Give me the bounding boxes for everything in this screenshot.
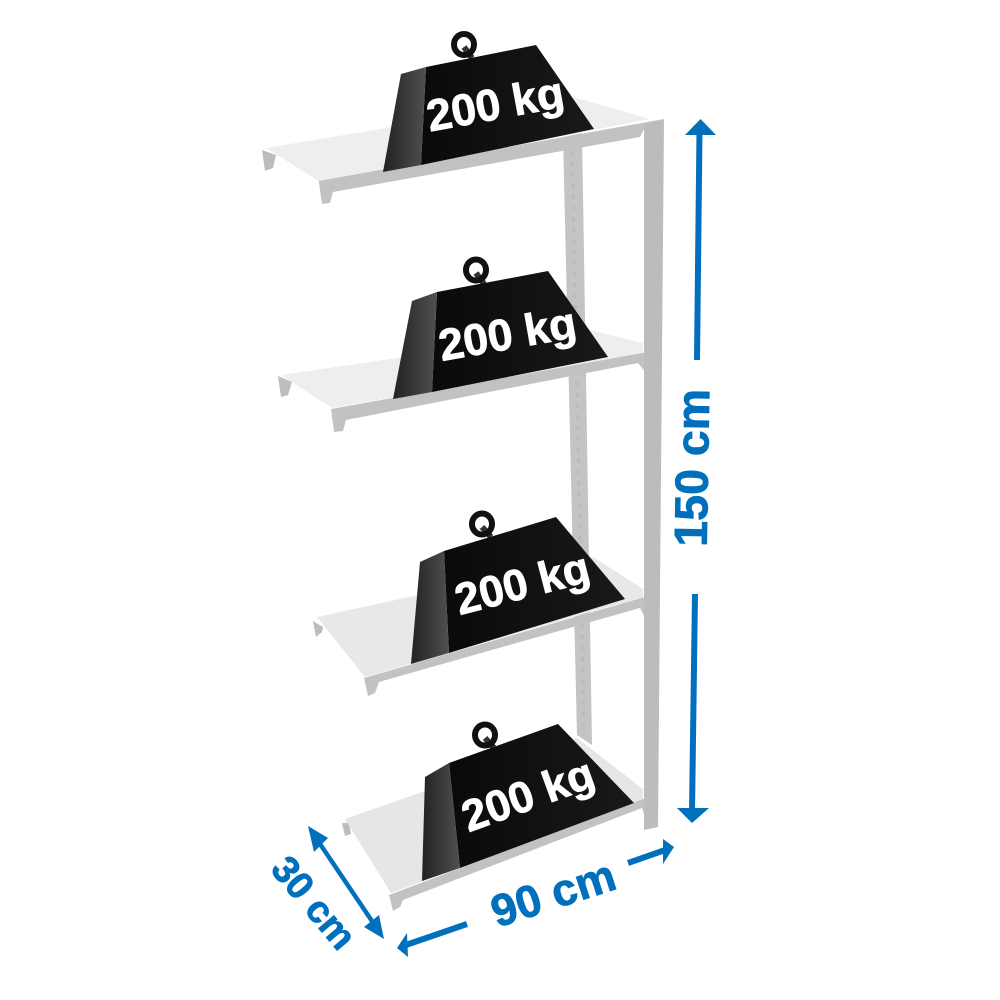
weight label 4: 200 kg <box>455 749 601 842</box>
weight side 2 <box>393 292 437 399</box>
arrow: width left <box>397 924 467 957</box>
weight label 2: 200 kg <box>435 299 580 371</box>
weight 4 <box>422 724 634 881</box>
icon: lifting ring 2 <box>466 260 486 284</box>
weight body 2 <box>432 271 608 392</box>
icon: lifting ring 1 <box>454 34 474 58</box>
weight 2 <box>393 260 608 399</box>
back upright post <box>563 133 592 745</box>
weight 1 <box>383 34 594 172</box>
icon: lifting ring 3 <box>472 514 492 537</box>
label: width: 90 cm <box>485 849 622 937</box>
weight label 3: 200 kg <box>450 543 595 625</box>
label: depth: 30 cm <box>262 849 364 958</box>
label: height: 150 cm <box>665 388 719 547</box>
weight body 3 <box>444 517 625 653</box>
weight body 4 <box>449 724 634 868</box>
arrow: height lower <box>677 594 709 823</box>
arrow: depth <box>308 826 384 939</box>
arrow: width right <box>628 839 674 864</box>
front upright post <box>644 119 664 830</box>
weight 3 <box>411 514 625 664</box>
weight label 1: 200 kg <box>423 68 568 141</box>
icon: lifting ring 4 <box>475 724 495 748</box>
shelf 4 <box>342 738 646 911</box>
weight side 3 <box>411 551 449 664</box>
weight side 1 <box>383 67 426 172</box>
shelf 3 <box>313 557 648 696</box>
shelf 1 <box>262 97 664 204</box>
weight side 4 <box>422 763 460 881</box>
arrow: height upper <box>685 119 716 360</box>
shelf 2 <box>278 330 648 432</box>
weight body 1 <box>421 45 594 165</box>
